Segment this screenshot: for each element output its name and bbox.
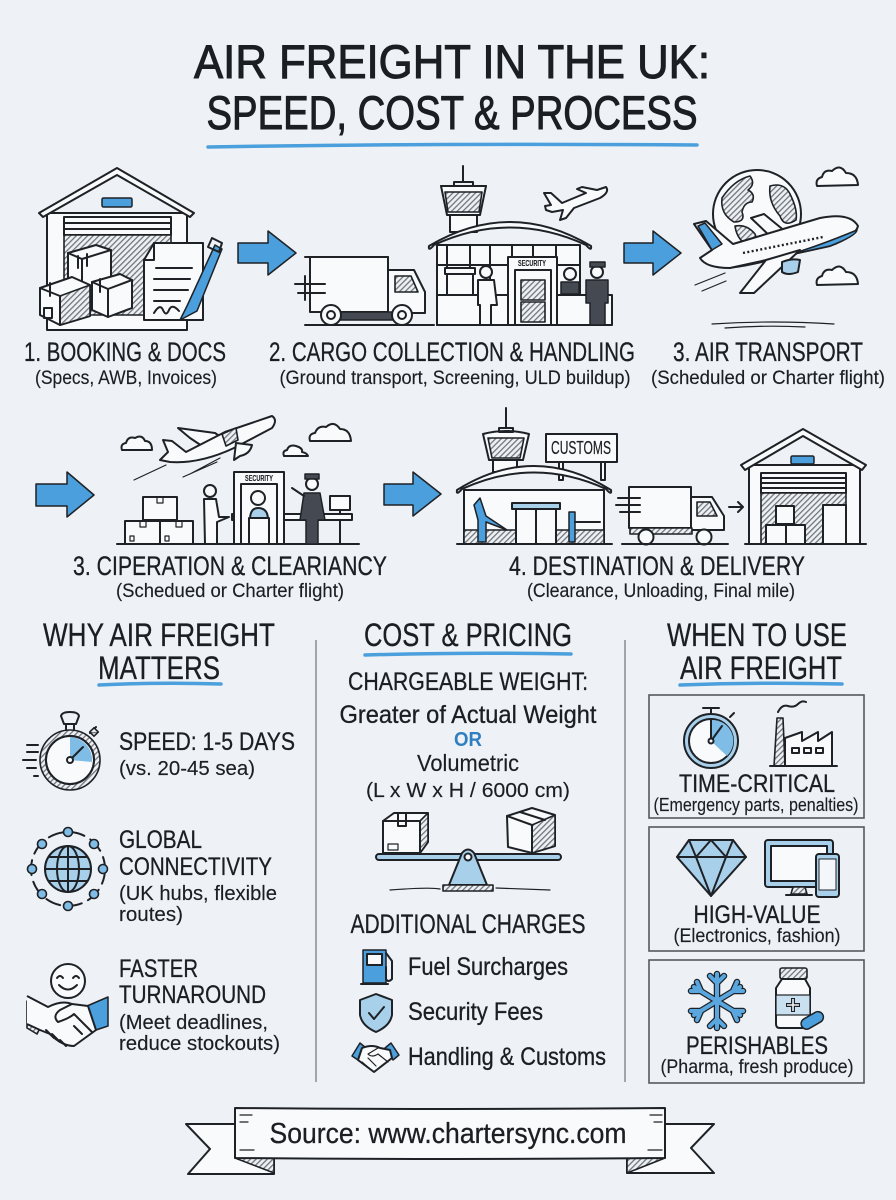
step 4 label: (Clearance, Unloading, Final mile)	[527, 580, 795, 602]
item: fuel surcharges: Fuel Surcharges	[408, 953, 568, 981]
counter and ground	[232, 514, 352, 520]
arrow 1	[238, 231, 296, 275]
text: chargeable weight	[340, 668, 597, 802]
column dividers	[316, 640, 625, 1082]
item: security fees: Security Fees	[408, 998, 543, 1026]
text: global connectivity: GLOBAL	[119, 826, 202, 854]
text: chargeable weight: CHARGEABLE WEIGHT:	[348, 668, 588, 696]
text: speed: SPEED: 1-5 DAYS	[119, 728, 295, 756]
icon: destination warehouse	[741, 429, 866, 544]
arrow 3	[36, 472, 94, 517]
text: faster turnaround	[119, 955, 280, 1055]
document	[144, 243, 203, 320]
officer	[306, 478, 318, 490]
card: perishables: (Pharma, fresh produce)	[660, 1056, 854, 1078]
monitor	[330, 496, 350, 510]
icon: airport terminal with control tower, security and plane: SECURITY	[518, 259, 546, 268]
text: global connectivity: CONNECTIVITY	[119, 853, 272, 881]
card: time-critical: (Emergency parts, penalties)	[654, 794, 858, 815]
title: SPEED, COST & PROCESS	[206, 86, 698, 139]
item: security fees	[360, 994, 543, 1032]
text: faster turnaround: TURNAROUND	[119, 981, 266, 1009]
icon: destination airport with customs sign	[457, 408, 617, 544]
icon: warehouse with boxes and documents	[39, 168, 222, 330]
text: global connectivity: (UK hubs, flexible	[119, 883, 277, 905]
icon: airport terminal with control tower, security and plane	[429, 166, 612, 325]
heading: when to use air freight: WHEN TO USE	[667, 617, 847, 653]
step 4 label: 4. DESTINATION & DELIVERY	[509, 551, 805, 581]
title: AIR FREIGHT IN THE UK:	[194, 35, 710, 88]
boxes	[68, 245, 111, 292]
card: perishables: PERISHABLES	[686, 1032, 828, 1060]
step 3b label: 3. CIPERATION & CLEARIANCY	[73, 551, 387, 581]
security gate	[234, 472, 284, 544]
text: chargeable weight: (L x W x H / 6000 cm)	[366, 780, 570, 802]
item: handling and customs	[352, 1043, 606, 1072]
icon: security checkpoint with plane and boxes	[117, 416, 359, 544]
icon: balance scale with boxes	[376, 808, 561, 891]
card: high-value	[649, 827, 864, 951]
step 2 label: 2. CARGO COLLECTION & HANDLING	[269, 337, 635, 367]
card: perishables	[649, 960, 864, 1083]
icon: destination airport with customs sign: CUSTOMS	[551, 438, 611, 458]
source banner: Source: www.chartersync.com	[270, 1118, 626, 1150]
card: high-value: (Electronics, fashion)	[674, 925, 840, 947]
text: faster turnaround: (Meet deadlines,	[119, 1012, 268, 1034]
text: chargeable weight: OR	[454, 729, 483, 751]
step 1 label	[24, 337, 226, 389]
heading: why air freight matters	[43, 617, 275, 686]
text: faster turnaround: FASTER	[119, 955, 198, 983]
step 2 label	[269, 337, 635, 389]
step 3b label	[73, 551, 387, 602]
icon: truck	[295, 257, 460, 325]
text: speed: (vs. 20-45 sea)	[119, 758, 255, 780]
icon: airplane with globe and clouds	[694, 167, 858, 328]
step 4 label	[509, 551, 805, 602]
panel: cost and pricing	[340, 617, 606, 1072]
step 1 label: (Specs, AWB, Invoices)	[35, 367, 217, 389]
step 2 label: (Ground transport, Screening, ULD buildup)	[280, 367, 630, 389]
woman	[204, 485, 216, 497]
text: chargeable weight: Volumetric	[417, 750, 519, 776]
text: faster turnaround: reduce stockouts)	[119, 1033, 280, 1055]
title	[194, 35, 710, 147]
text: global connectivity: routes)	[119, 904, 183, 926]
arrow 2	[624, 231, 681, 275]
item: handling and customs: Handling & Customs	[408, 1043, 606, 1071]
card: high-value: HIGH-VALUE	[694, 901, 820, 929]
text: speed	[119, 728, 295, 780]
icon: handshake with smile	[27, 964, 108, 1046]
heading: additional charges: ADDITIONAL CHARGES	[350, 909, 586, 939]
icon: delivery truck	[616, 487, 743, 544]
card: time-critical: TIME-CRITICAL	[679, 770, 835, 798]
item: fuel surcharges	[361, 950, 568, 984]
heading: why air freight matters: WHY AIR FREIGHT	[43, 617, 275, 653]
step 1 label: 1. BOOKING & DOCS	[24, 337, 226, 367]
text: global connectivity	[119, 826, 277, 926]
step 3b label: (Schedued or Charter flight)	[116, 580, 344, 602]
heading: when to use air freight	[667, 617, 847, 686]
text: chargeable weight: Greater of Actual Weight	[340, 701, 597, 729]
source banner	[186, 1108, 714, 1174]
boxes	[143, 497, 177, 520]
step 3 label: (Scheduled or Charter flight)	[651, 367, 885, 389]
arrow 4	[384, 472, 441, 516]
heading: why air freight matters: MATTERS	[98, 650, 220, 686]
heading: when to use air freight: AIR FREIGHT	[680, 650, 842, 686]
icon: globe network	[28, 828, 108, 910]
heading: cost and pricing: COST & PRICING	[364, 617, 572, 653]
panel: why air freight matters	[23, 617, 295, 1055]
panel: when to use air freight	[649, 617, 864, 1083]
step 3 label	[651, 337, 885, 389]
icon: stopwatch	[23, 712, 100, 790]
card: time-critical	[649, 695, 864, 818]
icon: security checkpoint with plane and boxes: SECURITY	[245, 474, 273, 483]
